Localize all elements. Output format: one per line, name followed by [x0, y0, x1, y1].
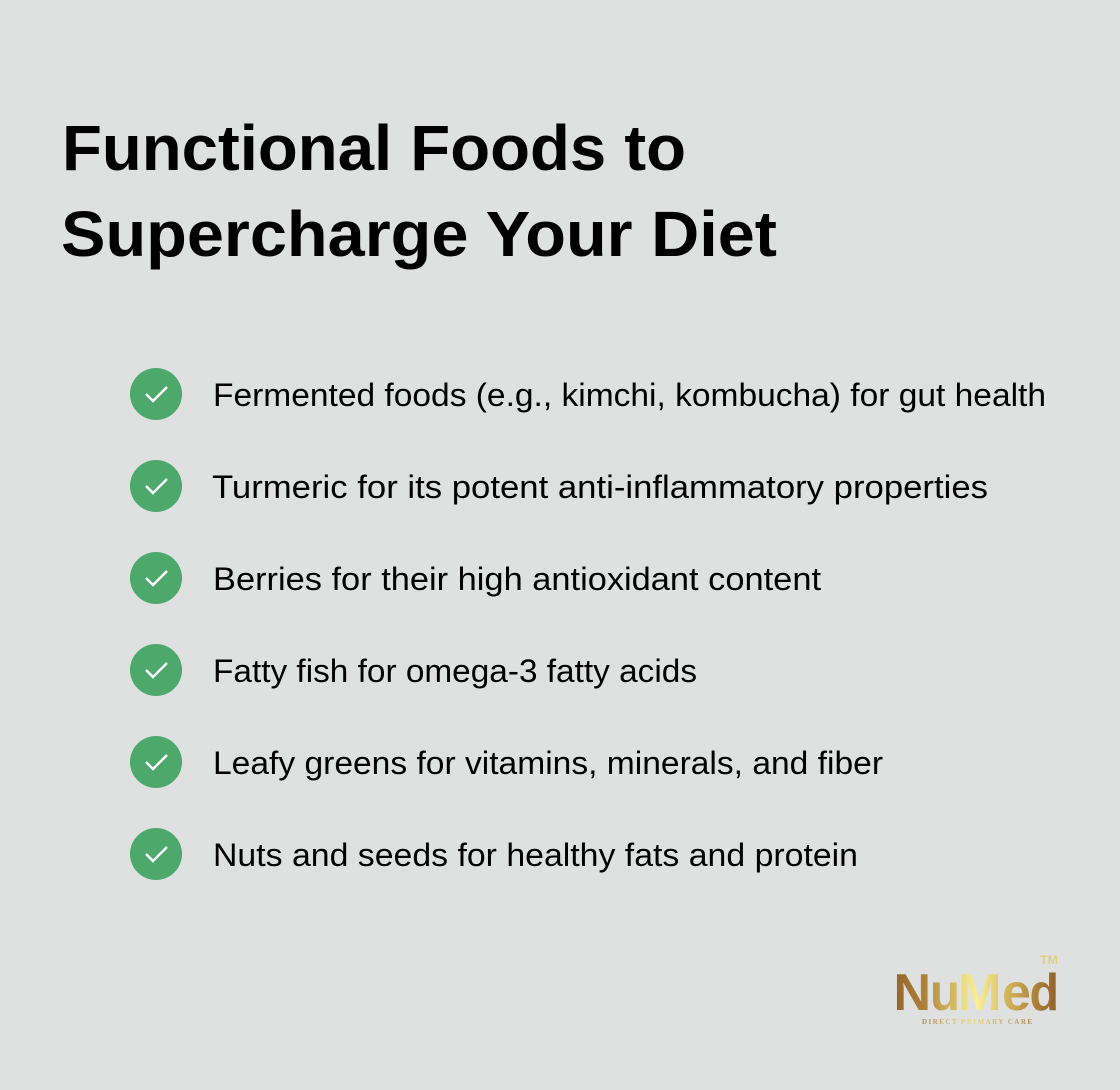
list item: nuts and seeds	[130, 828, 858, 880]
list item: leafy greens: Leafy greens for vitamins, minerals, and fiber	[213, 745, 883, 781]
list item: leafy greens	[130, 736, 883, 788]
logo: NuMed: e	[1002, 964, 1031, 1022]
title: Supercharge Your Diet	[61, 198, 777, 270]
list item: fermented foods	[130, 368, 1046, 420]
logo: NuMed: N	[894, 964, 931, 1022]
list item: fatty fish: Fatty fish for omega-3 fatty acids	[213, 653, 697, 689]
title: Functional Foods to	[62, 112, 686, 184]
list item: berries: Berries for their high antioxidant content	[213, 561, 821, 597]
logo: NuMed: d	[1030, 963, 1059, 1021]
title	[61, 112, 777, 270]
logo: NuMed	[894, 953, 1059, 1026]
list item: berries	[130, 552, 821, 604]
logo: NuMed: M	[958, 964, 1001, 1022]
logo: NuMed: TM	[1040, 953, 1058, 967]
checklist	[130, 368, 1046, 880]
list item: fermented foods: Fermented foods (e.g., kimchi, kombucha) for gut health	[213, 377, 1046, 413]
logo: NuMed: u	[930, 963, 960, 1021]
list item: fatty fish	[130, 644, 697, 696]
list item: nuts and seeds: Nuts and seeds for healthy fats and protein	[213, 837, 858, 873]
list item: turmeric	[130, 460, 988, 512]
list item: turmeric: Turmeric for its potent anti-inflammatory properties	[212, 469, 988, 505]
logo: NuMed: DIRECT PRIMARY CARE	[922, 1018, 1032, 1026]
